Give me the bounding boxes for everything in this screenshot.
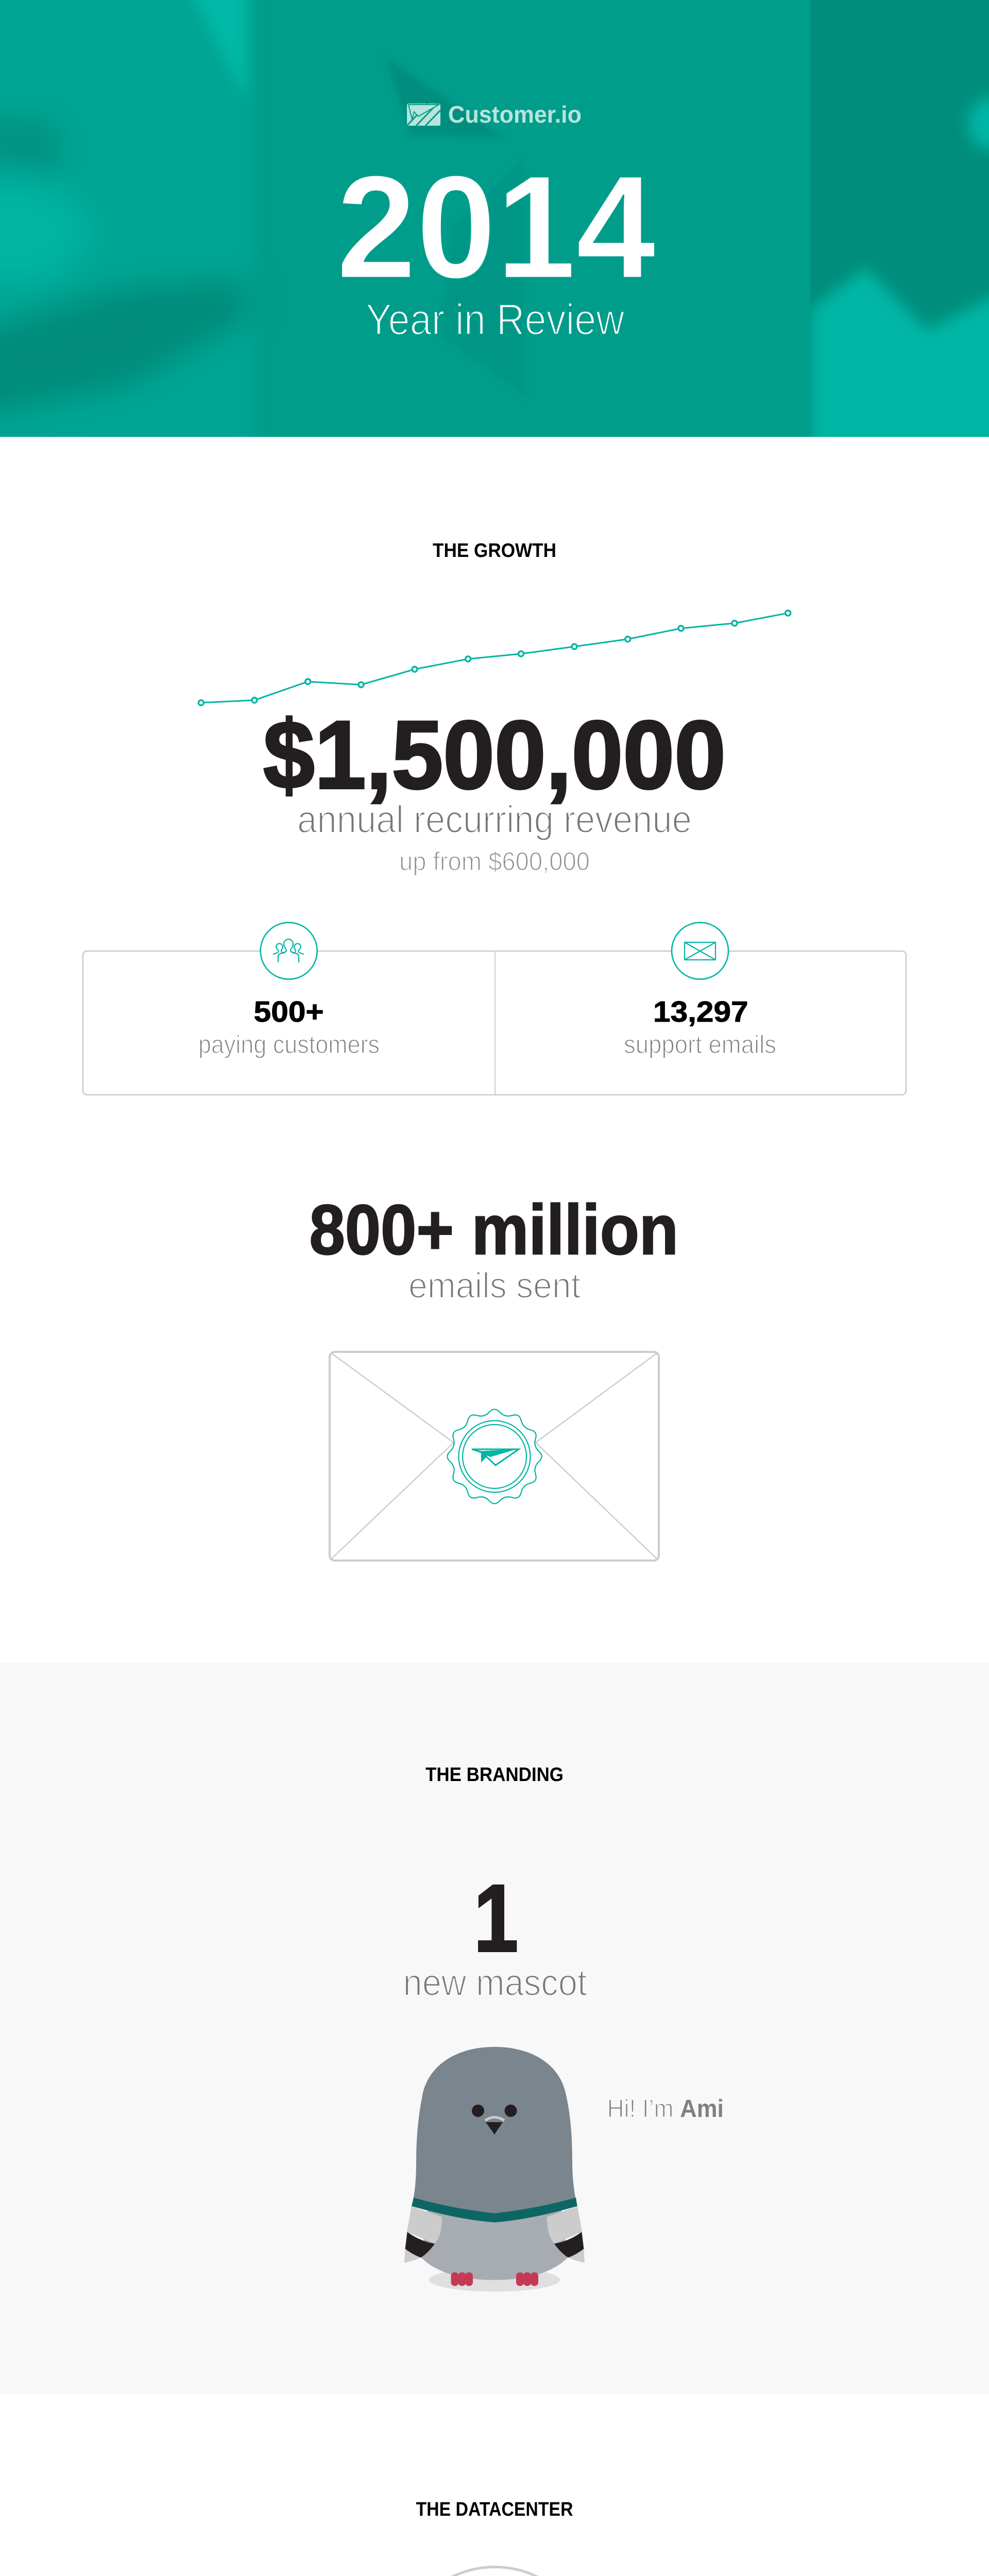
callout: total servers xyxy=(397,2567,592,2576)
illustration: envelope with seal xyxy=(330,1352,659,1561)
logo text: Customer.io xyxy=(448,101,582,128)
illustration: Ami the pigeon xyxy=(404,2047,585,2292)
panel: the datacenter xyxy=(83,2499,906,2576)
stat: support emails number: 13,297 xyxy=(653,995,748,1028)
panel: hero banner xyxy=(0,0,989,469)
panel: the branding xyxy=(0,1663,989,2394)
beak xyxy=(485,2117,504,2134)
heading: the branding: THE BRANDING xyxy=(425,1764,564,1786)
mascot greeting xyxy=(607,2095,724,2123)
mascot greeting: Hi! I’m xyxy=(607,2095,674,2123)
heading: the datacenter: THE DATACENTER xyxy=(416,2499,573,2520)
stat: support emails label: support emails xyxy=(624,1031,776,1059)
heading: the growth: THE GROWTH xyxy=(433,540,556,562)
previous revenue: up from $600,000 xyxy=(399,847,590,876)
right wing xyxy=(547,2206,585,2263)
icon: wax seal xyxy=(447,1409,542,1504)
emails sent label: emails sent xyxy=(408,1265,581,1306)
mascot count: 1 xyxy=(474,1866,518,1972)
shadow xyxy=(429,2268,560,2292)
revenue number: $1,500,000 xyxy=(263,701,726,809)
mascot label: new mascot xyxy=(403,1962,587,2004)
revenue label: annual recurring revenue xyxy=(297,798,692,841)
emails sent number: 800+ million xyxy=(309,1191,678,1269)
mascot greeting: Ami xyxy=(680,2095,724,2123)
stat panel: customers and support xyxy=(83,923,906,1095)
feet xyxy=(451,2273,538,2286)
hero year: 2014 xyxy=(336,145,657,309)
icon: logo mark xyxy=(407,104,440,126)
line chart: revenue growth xyxy=(198,611,791,705)
icon: support emails xyxy=(672,923,728,979)
hero blurred photo background xyxy=(0,0,989,469)
stat: paying customers number: 500+ xyxy=(254,995,324,1028)
icon: customers xyxy=(261,923,317,979)
stat: paying customers label: paying customers xyxy=(198,1031,380,1059)
belly xyxy=(421,2210,568,2280)
left wing xyxy=(404,2206,442,2263)
neck band xyxy=(412,2198,577,2223)
panel: the growth xyxy=(83,540,906,1561)
eyes xyxy=(472,2105,517,2117)
head and body xyxy=(413,2047,576,2213)
logo: Customer.io xyxy=(407,101,582,128)
hero subtitle: Year in Review xyxy=(366,295,624,344)
